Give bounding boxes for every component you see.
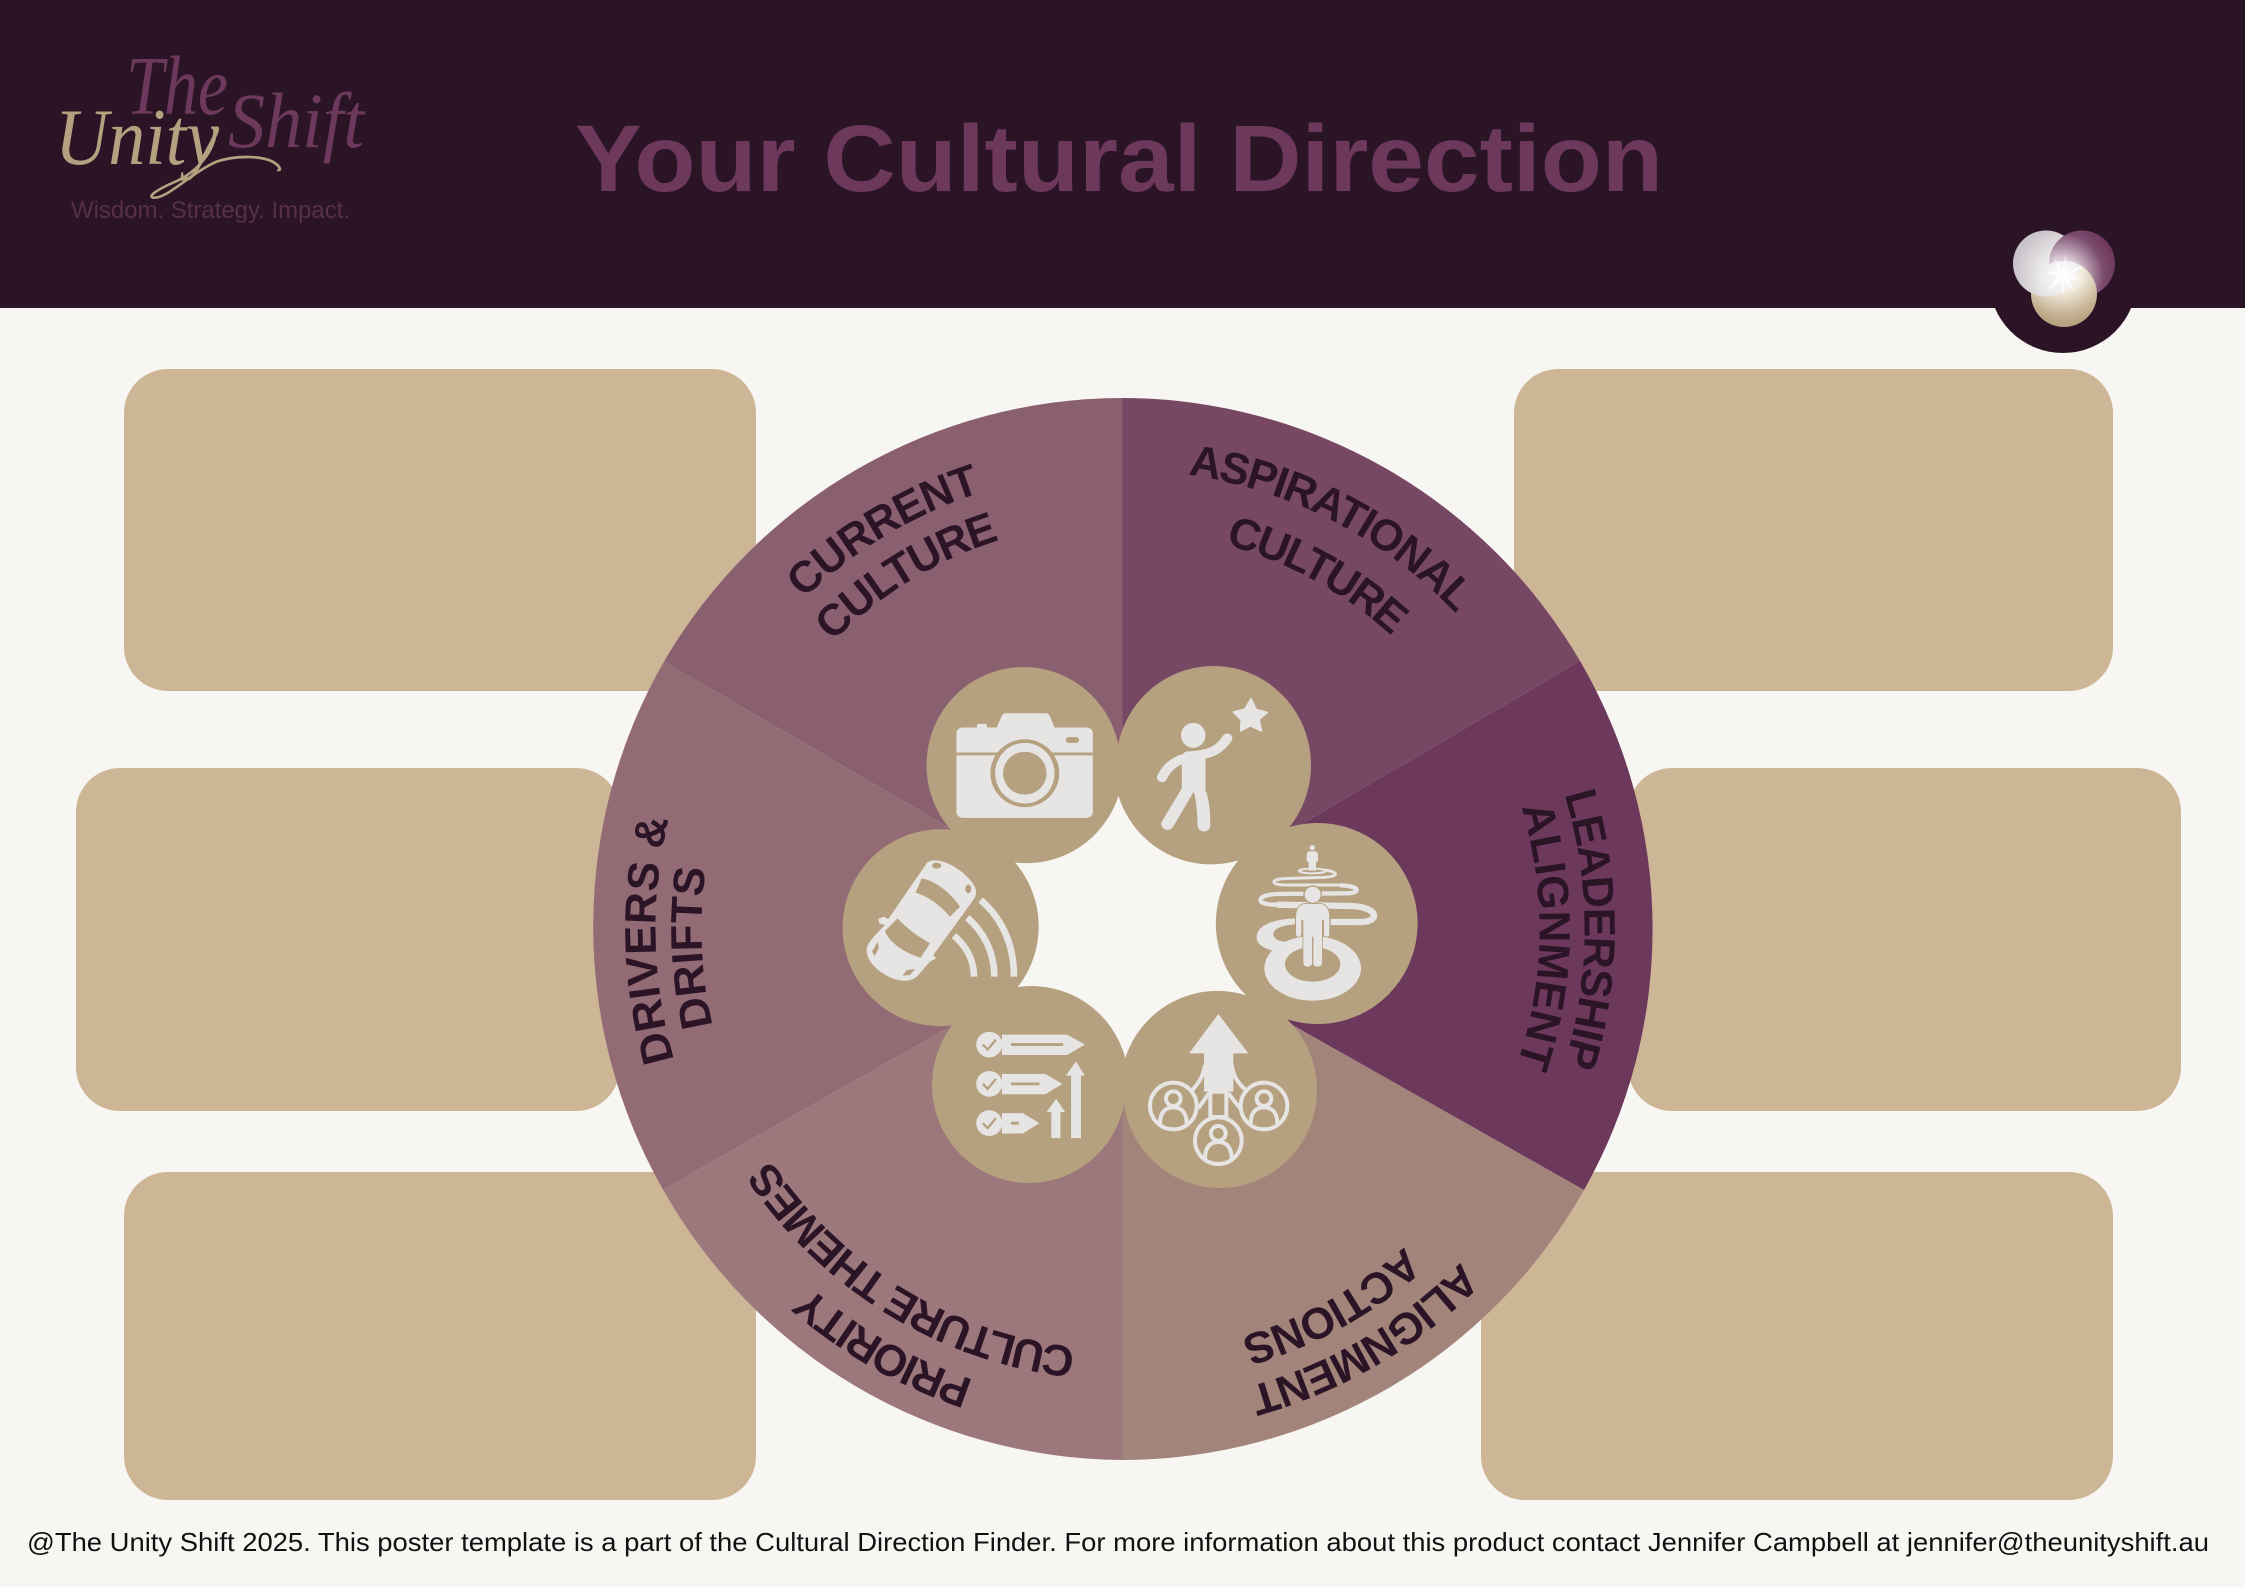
icon: person reaching for a star: [1116, 666, 1311, 864]
wheel segment: aspirational culture: [1122, 398, 1580, 929]
icon: leadership path with figures: [1218, 823, 1418, 1024]
panel: upper right text box: [1514, 369, 2113, 691]
icon: car drifting: [843, 829, 1039, 1026]
logo: The Unity Shift: [55, 40, 366, 224]
centre star opening: [1015, 796, 1246, 1058]
icon: camera: [926, 667, 1120, 863]
logo: The Unity Shift: Unity: [55, 94, 219, 182]
label: current culture: CULTURE: [818, 512, 998, 636]
footer note: @The Unity Shift 2025. This poster template is a part of the Cultural Direction Finder. For more information about this product contact Jennifer Campbell at jennifer@theunityshift.au: [27, 1527, 2209, 1557]
label: aspirational culture: CULTURE: [1230, 519, 1410, 635]
label: priority culture themes: CULTURE THEMES: [750, 1164, 1072, 1376]
panel: lower left text box: [124, 1172, 756, 1500]
icon hub filler joining the six circles: [941, 765, 1318, 1090]
logo: The Unity Shift: The: [126, 40, 228, 133]
icon: checklist with rising arrows: [932, 987, 1126, 1183]
panel: middle left text box: [76, 768, 620, 1111]
panel: upper left text box: [124, 369, 756, 691]
wheel segment: current culture: [664, 398, 1122, 929]
title: Your Cultural Direction: [575, 106, 1663, 212]
badge: three overlapping circles: [1995, 230, 2131, 353]
label: priority culture themes: PRIORITY: [790, 1294, 971, 1408]
label: alignment actions: ALIGNMENT: [1256, 1263, 1474, 1416]
label: leadership alignment: ALIGNMENT: [1520, 808, 1570, 1073]
icon: arrow rising from three people: [1123, 992, 1317, 1188]
wheel segment: leadership alignment: [1122, 661, 1653, 1190]
label: drivers and drifts: [625, 819, 712, 1065]
label: current culture: CURRENT: [790, 464, 972, 592]
label: alignment actions: ACTIONS: [1244, 1248, 1415, 1364]
wheel segment: drivers and drifts: [593, 662, 1122, 1190]
panel: middle right text box: [1628, 768, 2181, 1111]
label: leadership alignment: LEADERSHIP: [1566, 789, 1615, 1070]
label: leadership alignment: [1520, 789, 1615, 1073]
logo: The Unity Shift: Wisdom. Strategy. Impact.: [71, 197, 350, 224]
wheel segment: alignment actions: [1122, 929, 1584, 1460]
panel: lower right text box: [1481, 1172, 2113, 1500]
logo: The Unity Shift: Shift: [228, 77, 366, 164]
label: drivers and drifts: DRIFTS: [671, 868, 712, 1029]
header band: [0, 0, 2245, 308]
wheel segment: priority culture themes: [663, 929, 1122, 1460]
label: aspirational culture: ASPIRATIONAL: [1189, 446, 1466, 613]
label: drivers and drifts: DRIVERS &: [625, 819, 674, 1065]
